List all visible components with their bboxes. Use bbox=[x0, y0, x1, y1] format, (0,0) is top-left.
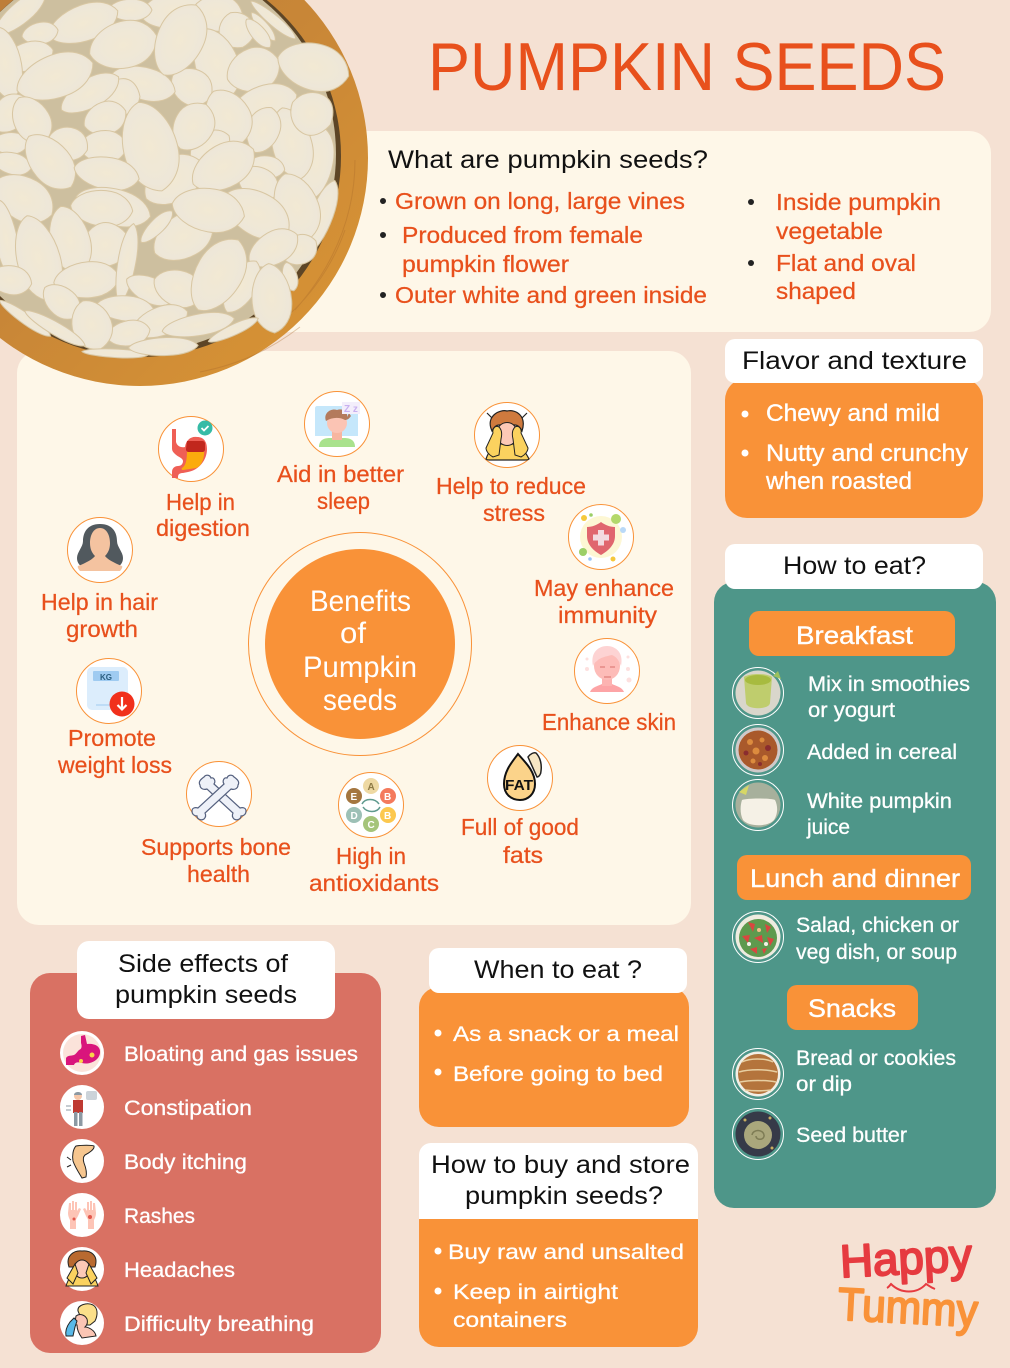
text: juice: juice bbox=[806, 815, 850, 839]
panel: flavor and texture bbox=[725, 339, 983, 518]
benefit: antioxidants: C bbox=[368, 820, 375, 831]
benefit: sleep bbox=[304, 392, 370, 456]
benefit: fats: FAT bbox=[505, 778, 533, 794]
panel: how to eat bbox=[714, 544, 996, 1208]
heading: when to eat bbox=[429, 948, 687, 993]
benefit: weight loss bbox=[76, 658, 142, 724]
benefit: immunity bbox=[568, 504, 634, 570]
heading: flavor and texture bbox=[725, 339, 983, 383]
text: salad: Salad, chicken or bbox=[796, 913, 959, 937]
heading: how to buy and store bbox=[419, 1143, 698, 1219]
logo: happy tummy: Tummy bbox=[837, 1278, 979, 1337]
benefit: sleep: Z z bbox=[344, 404, 358, 415]
panel: benefits bbox=[17, 351, 691, 925]
benefit: fats bbox=[488, 746, 552, 810]
text: salad bbox=[796, 913, 959, 964]
label: bone: health bbox=[187, 861, 250, 887]
panel: when to eat bbox=[419, 948, 689, 1127]
label: sleep: sleep bbox=[317, 488, 370, 514]
label: bone bbox=[141, 834, 291, 887]
label: stress bbox=[436, 473, 586, 526]
pill: lunch and dinner bbox=[737, 855, 971, 900]
text: cereal: Added in cereal bbox=[807, 740, 957, 764]
label: digestion bbox=[156, 489, 250, 541]
pill: snacks bbox=[787, 985, 918, 1030]
benefits hub circle bbox=[248, 532, 472, 756]
benefit: stress bbox=[474, 402, 540, 468]
panel: how to buy and store bbox=[419, 1143, 698, 1347]
benefit: skin bbox=[574, 638, 640, 704]
text: rashes: Rashes bbox=[124, 1204, 195, 1228]
food: bread bbox=[732, 1048, 784, 1100]
pill: lunch and dinner: Lunch and dinner bbox=[750, 865, 960, 893]
text: smoothies: or yogurt bbox=[808, 698, 895, 722]
list: buy and store bbox=[434, 1240, 684, 1332]
text: bread: or dip bbox=[796, 1072, 852, 1096]
logo: happy tummy bbox=[837, 1229, 979, 1337]
list: right facts: Flat and oval bbox=[776, 250, 916, 276]
logo: happy tummy: Happy bbox=[839, 1229, 973, 1287]
panel: side effects bbox=[30, 941, 381, 1353]
label: digestion: digestion bbox=[156, 515, 250, 541]
label: stress: stress bbox=[483, 500, 545, 526]
text: bloating: Bloating and gas issues bbox=[124, 1042, 358, 1066]
label: antioxidants: High in bbox=[336, 843, 406, 869]
list: right facts: shaped bbox=[776, 278, 856, 304]
text: juice: White pumpkin bbox=[807, 789, 952, 813]
list: flavor: Nutty and crunchy bbox=[766, 440, 968, 467]
row: rashes bbox=[60, 1193, 195, 1237]
label: weight loss: Promote bbox=[68, 725, 156, 751]
benefits hub circle: of bbox=[340, 617, 367, 650]
list: buy and store: Keep in airtight bbox=[453, 1280, 618, 1304]
food: smoothie bbox=[732, 668, 784, 718]
row: body itching bbox=[60, 1139, 247, 1183]
text: headaches: Headaches bbox=[124, 1258, 235, 1282]
heading: when to eat: When to eat ? bbox=[474, 956, 642, 984]
list: buy and store: containers bbox=[453, 1308, 567, 1332]
heading: what are pumpkin seeds: What are pumpkin seeds? bbox=[388, 146, 708, 174]
list: flavor: Chewy and mild bbox=[766, 400, 940, 427]
text: smoothies: Mix in smoothies bbox=[808, 672, 970, 696]
label: stress: Help to reduce bbox=[436, 473, 586, 499]
title: PUMPKIN SEEDS bbox=[428, 29, 946, 105]
text: seed butter: Seed butter bbox=[796, 1123, 907, 1147]
list: left facts: Outer white and green inside bbox=[395, 282, 707, 308]
benefit: bone bbox=[186, 762, 252, 826]
label: immunity: May enhance bbox=[534, 575, 674, 601]
heading: how to eat bbox=[725, 544, 983, 589]
text: juice bbox=[806, 789, 952, 839]
panel: what are pumpkin seeds bbox=[250, 131, 991, 332]
text: bread bbox=[796, 1046, 956, 1096]
benefit: digestion bbox=[158, 416, 224, 482]
label: antioxidants bbox=[309, 843, 439, 896]
heading: how to buy and store: How to buy and store bbox=[431, 1151, 690, 1179]
row: constipation bbox=[60, 1085, 252, 1129]
row: bloating bbox=[60, 1031, 358, 1075]
label: fats bbox=[461, 814, 579, 868]
benefit: hair bbox=[68, 518, 132, 582]
label: sleep: Aid in better bbox=[277, 461, 404, 487]
list: right facts: Inside pumpkin bbox=[776, 189, 941, 215]
list: buy and store: Buy raw and unsalted bbox=[448, 1240, 684, 1264]
food: cereal bbox=[732, 724, 784, 776]
food: juice bbox=[732, 780, 784, 830]
food: seed butter bbox=[732, 1108, 784, 1160]
benefits hub circle: Pumpkin bbox=[303, 651, 417, 684]
pill: breakfast: Breakfast bbox=[796, 622, 913, 650]
label: hair bbox=[41, 589, 158, 642]
label: digestion: Help in bbox=[166, 489, 235, 515]
label: skin: Enhance skin bbox=[542, 709, 676, 735]
benefit: antioxidants: B bbox=[384, 792, 391, 803]
pill: breakfast bbox=[749, 611, 955, 656]
benefit: antioxidants bbox=[338, 772, 404, 838]
list: flavor: when roasted bbox=[765, 468, 912, 495]
benefits hub circle: Benefits bbox=[310, 585, 411, 618]
list: when to eat bbox=[434, 1022, 679, 1086]
benefit: weight loss: KG bbox=[100, 673, 112, 682]
text: smoothies bbox=[808, 672, 970, 722]
row: difficulty breathing bbox=[60, 1301, 314, 1345]
list: left facts: pumpkin flower bbox=[402, 251, 569, 277]
list: left facts bbox=[380, 188, 707, 308]
list: flavor bbox=[742, 400, 968, 495]
label: immunity: immunity bbox=[558, 602, 658, 628]
heading: side effects: pumpkin seeds bbox=[115, 981, 297, 1009]
list: when to eat: As a snack or a meal bbox=[453, 1022, 679, 1046]
text: bread: Bread or cookies bbox=[796, 1046, 956, 1070]
label: weight loss bbox=[57, 725, 172, 778]
heading: how to buy and store: pumpkin seeds? bbox=[465, 1182, 663, 1210]
label: bone: Supports bone bbox=[141, 834, 291, 860]
food: salad bbox=[732, 912, 784, 962]
heading: side effects: Side effects of bbox=[118, 950, 288, 978]
benefit: antioxidants: A bbox=[368, 782, 375, 793]
heading: side effects bbox=[77, 941, 335, 1019]
text: difficulty breathing: Difficulty breathing bbox=[124, 1312, 314, 1336]
row: headaches bbox=[60, 1247, 235, 1291]
pill: snacks: Snacks bbox=[808, 995, 896, 1023]
label: sleep bbox=[277, 461, 404, 514]
benefits hub circle: seeds bbox=[323, 684, 397, 717]
benefit: antioxidants: B bbox=[384, 811, 391, 822]
benefit: antioxidants: D bbox=[350, 811, 358, 822]
list: left facts: Grown on long, large vines bbox=[395, 188, 685, 214]
list: right facts bbox=[748, 189, 941, 304]
list: left facts: Produced from female bbox=[402, 222, 643, 248]
text: salad: veg dish, or soup bbox=[796, 940, 957, 964]
heading: how to eat: How to eat? bbox=[783, 552, 926, 580]
photo: bowl of pumpkin seeds bbox=[0, 0, 368, 386]
label: immunity bbox=[534, 575, 674, 628]
label: antioxidants: antioxidants bbox=[309, 870, 439, 896]
label: fats: fats bbox=[503, 842, 543, 868]
list: when to eat: Before going to bed bbox=[453, 1062, 663, 1086]
label: weight loss: weight loss bbox=[57, 752, 172, 778]
text: constipation: Constipation bbox=[124, 1096, 252, 1120]
label: hair: Help in hair bbox=[41, 589, 158, 615]
label: hair: growth bbox=[66, 616, 138, 642]
benefit: antioxidants: E bbox=[350, 792, 358, 803]
text: body itching: Body itching bbox=[124, 1150, 247, 1174]
label: fats: Full of good bbox=[461, 814, 579, 840]
list: right facts: vegetable bbox=[776, 218, 883, 244]
heading: flavor and texture: Flavor and texture bbox=[742, 347, 967, 375]
